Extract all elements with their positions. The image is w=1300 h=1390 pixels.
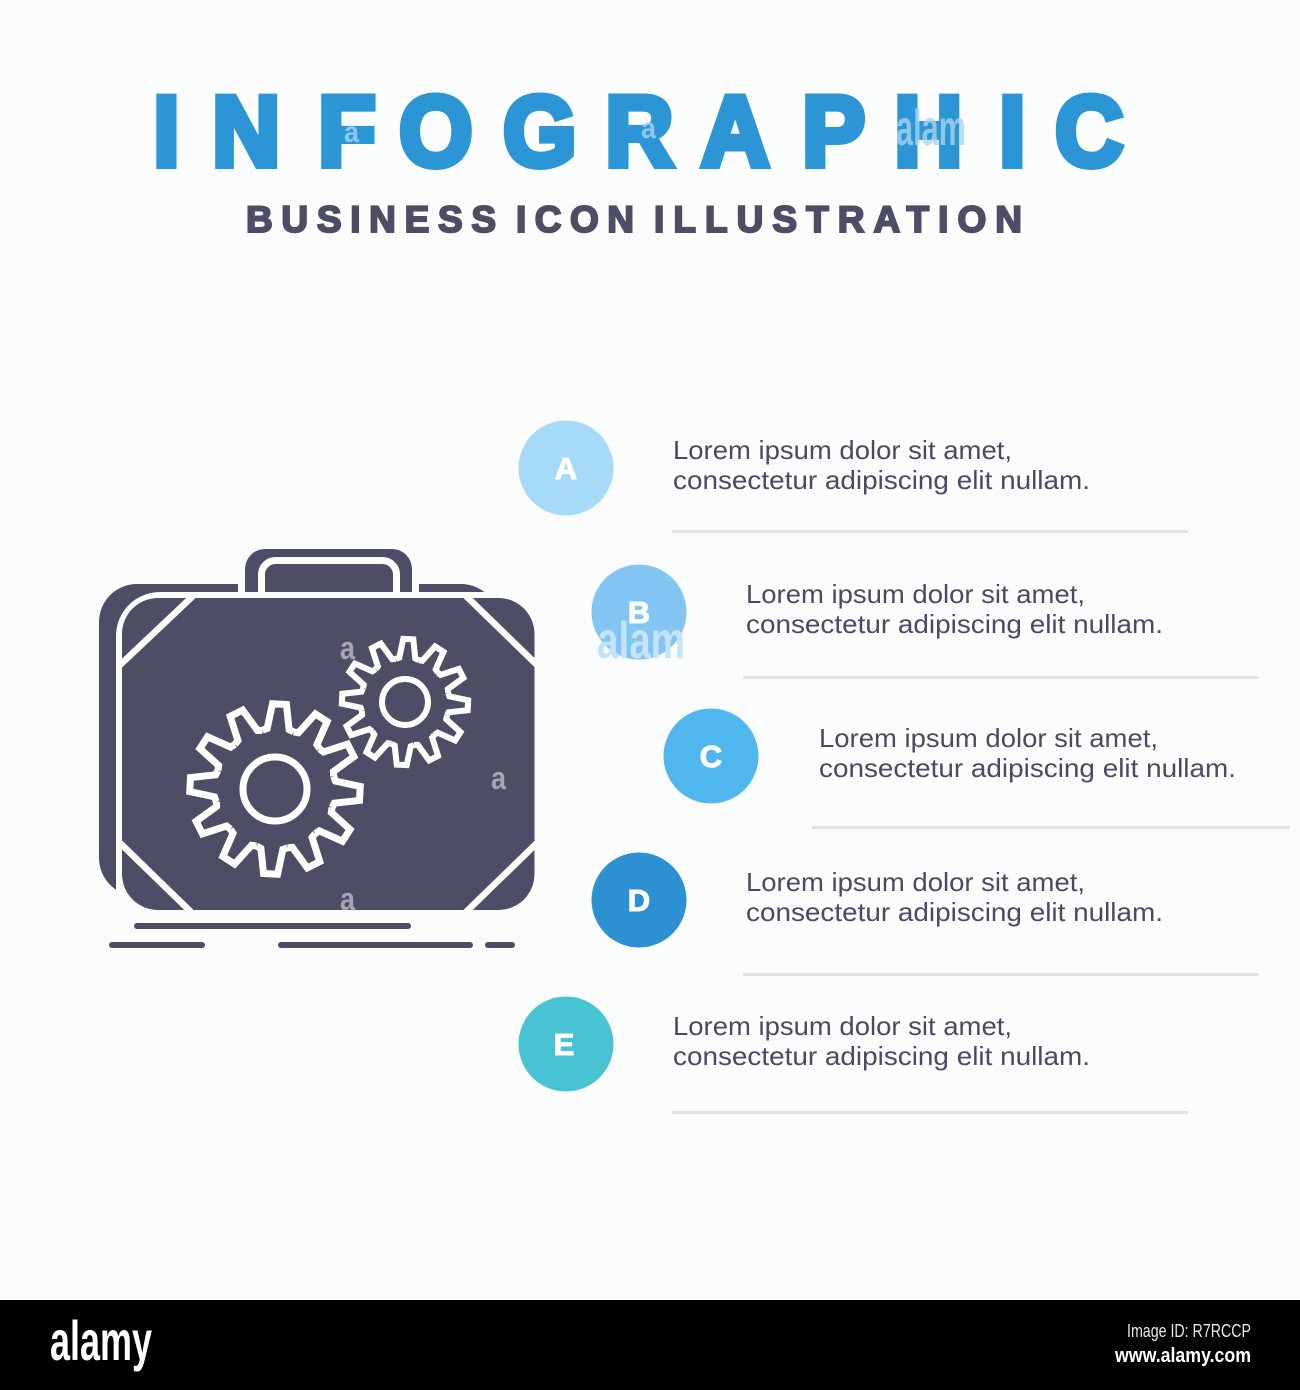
text A: consectetur adipiscing elit nullam.	[673, 465, 1090, 495]
text B: consectetur adipiscing elit nullam.	[746, 609, 1163, 639]
badge C	[664, 708, 758, 804]
badge B: B	[628, 595, 650, 630]
title: INFOGRAPHIC	[153, 77, 1123, 187]
watermark letters on briefcase	[340, 630, 506, 917]
badge B: alam	[597, 612, 685, 670]
footer bar	[0, 1300, 1300, 1390]
badge E: E	[554, 1027, 574, 1062]
step B	[592, 564, 1259, 679]
text E: Lorem ipsum dolor sit amet,	[673, 1011, 1012, 1041]
text B	[746, 579, 1163, 639]
step D	[592, 852, 1259, 976]
text D: Lorem ipsum dolor sit amet,	[746, 867, 1085, 897]
text D	[746, 867, 1163, 927]
subtitle: ICON	[516, 199, 634, 240]
badge E	[518, 996, 614, 1092]
icon: briefcase with gears	[99, 549, 554, 948]
step C	[664, 708, 1290, 829]
badge A	[518, 420, 614, 516]
badge B	[592, 564, 686, 670]
title: a	[344, 116, 359, 149]
title: alam	[896, 100, 966, 156]
briefcase handle	[245, 549, 412, 609]
watermark letters on briefcase: a	[491, 760, 506, 796]
text C	[819, 723, 1236, 783]
watermark letters on briefcase: a	[340, 630, 355, 666]
badge D: D	[628, 883, 650, 918]
badge A: A	[555, 451, 577, 486]
badge C: C	[700, 739, 722, 774]
text A	[673, 435, 1090, 495]
text B: Lorem ipsum dolor sit amet,	[746, 579, 1085, 609]
text A: Lorem ipsum dolor sit amet,	[673, 435, 1012, 465]
footer url: www.alamy.com	[1114, 1345, 1251, 1367]
step A	[518, 420, 1188, 533]
briefcase front panel	[116, 592, 546, 932]
footer logo: alamy	[50, 1309, 152, 1372]
text E	[673, 1011, 1090, 1071]
subtitle	[246, 199, 1022, 240]
text C: Lorem ipsum dolor sit amet,	[819, 723, 1158, 753]
image id: Image ID: R7RCCP	[1127, 1321, 1251, 1341]
title: a	[641, 112, 656, 145]
small gear	[339, 636, 471, 768]
text E: consectetur adipiscing elit nullam.	[673, 1041, 1090, 1071]
ground lines	[109, 923, 515, 948]
briefcase back panel	[99, 584, 499, 896]
text D: consectetur adipiscing elit nullam.	[746, 897, 1163, 927]
subtitle: ILLUSTRATION	[654, 199, 1022, 240]
subtitle: BUSINESS	[246, 199, 496, 240]
badge D	[592, 852, 686, 948]
text C: consectetur adipiscing elit nullam.	[819, 753, 1236, 783]
large gear	[186, 700, 364, 878]
step E	[518, 996, 1188, 1114]
corner straps	[120, 596, 537, 912]
watermark letters on briefcase: a	[340, 881, 355, 917]
